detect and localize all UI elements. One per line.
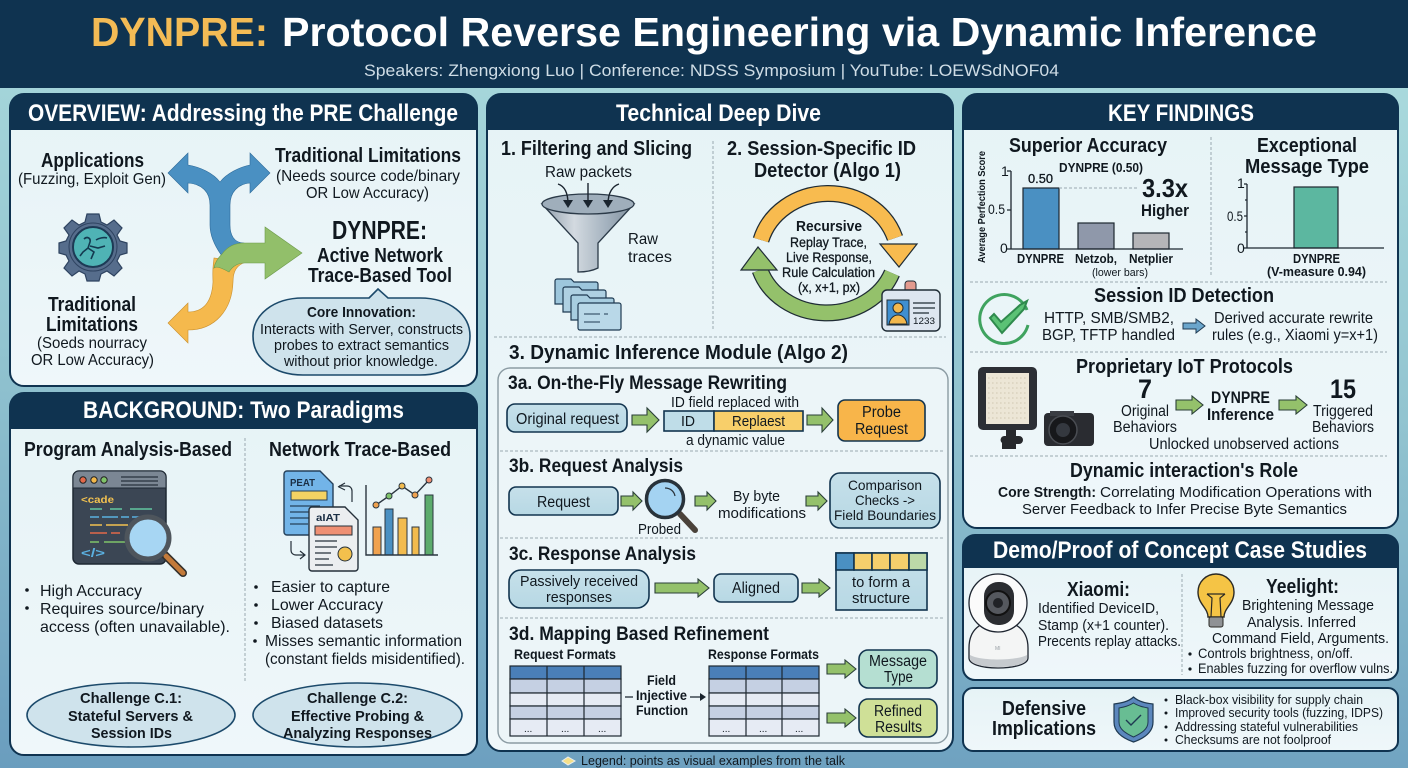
box: message type: Message bbox=[869, 653, 927, 670]
table: request formats: ... bbox=[561, 724, 569, 735]
text: protocols handled: HTTP, SMB/SMB2, bbox=[1044, 310, 1174, 327]
text: traditional limitations bottom bbox=[31, 294, 154, 369]
label: field injective function: Field bbox=[647, 672, 676, 688]
text: applications: Applications bbox=[41, 150, 144, 172]
callout: core innovation: probes to extract semantics bbox=[274, 338, 449, 354]
box: comparison checks: Checks -> bbox=[855, 492, 915, 508]
text: traditional limitations top: (Needs source code/binary bbox=[276, 168, 460, 185]
text: recursive loop: (x, x+1, px) bbox=[798, 279, 860, 295]
icon: camera bbox=[1044, 411, 1094, 446]
text: 7 original behaviors: Original bbox=[1121, 403, 1169, 420]
list: defensive bullets: Addressing stateful vulnerabilities bbox=[1175, 719, 1358, 734]
section: 3a rewriting: 3a. On-the-Fly Message Rewriting bbox=[508, 373, 787, 394]
header banner bbox=[0, 0, 1408, 88]
list: network trace bullets: (constant fields misidentified). bbox=[265, 651, 465, 668]
list: program analysis bullets: access (often unavailable). bbox=[40, 619, 230, 636]
text: traditional limitations bottom: (Soeds nourracy bbox=[37, 335, 147, 352]
list: defensive bullets: Checksums are not foolproof bbox=[1175, 732, 1331, 747]
text: DYNPRE tool: DYNPRE: bbox=[332, 215, 427, 245]
icon: led light panel bbox=[978, 367, 1037, 449]
panel: background bbox=[10, 393, 477, 755]
text: derived rewrite rules: rules (e.g., Xiaomi y=x+1) bbox=[1212, 327, 1378, 344]
list: program analysis bullets: High Accuracy bbox=[40, 583, 142, 600]
label: field injective function: Injective bbox=[636, 687, 687, 703]
callout: 3.3x higher: Higher bbox=[1141, 201, 1189, 220]
callout: core innovation bbox=[253, 289, 470, 375]
panel: defensive implications bbox=[963, 688, 1398, 751]
icon: xiaomi camera bbox=[969, 574, 1028, 668]
text: yeelight: Analysis. Inferred bbox=[1247, 614, 1356, 631]
callout: challenge C.2: Challenge C.2: bbox=[307, 690, 408, 707]
icon: green check bbox=[980, 295, 1028, 344]
heading: session-specific id detector bbox=[727, 138, 916, 182]
section: 3c response analysis: 3c. Response Analysis bbox=[509, 544, 696, 565]
callout: challenge C.1 bbox=[27, 683, 235, 747]
text: dynpre inference: Inference bbox=[1207, 405, 1274, 424]
arrow: blue bbox=[1183, 319, 1205, 333]
list: yeelight bullets bbox=[1188, 645, 1393, 676]
box: comparison checks: Comparison bbox=[848, 477, 922, 493]
heading: program analysis: Program Analysis-Based bbox=[24, 439, 232, 461]
chart: average perfection score bars: DYNPRE (0.50) bbox=[1059, 160, 1143, 175]
box: message type: Type bbox=[884, 669, 913, 686]
chart: v-measure bar: 0 bbox=[1237, 240, 1245, 256]
title: Protocol Reverse Engineering via Dynamic Inference bbox=[282, 9, 1317, 55]
box: passively received: Passively received bbox=[520, 573, 638, 590]
text: core strength: Correlating Modification Operations with bbox=[1100, 484, 1372, 501]
callout: core innovation: Interacts with Server, constructs bbox=[260, 322, 463, 338]
table: response formats: ... bbox=[722, 724, 730, 735]
list: yeelight bullets: Controls brightness, on/off. bbox=[1198, 645, 1353, 661]
text: yeelight bbox=[1212, 576, 1389, 647]
arrow bbox=[621, 492, 642, 510]
arrow bbox=[1176, 396, 1203, 414]
arrow: blue split arrow bbox=[168, 153, 270, 262]
list: defensive bullets bbox=[1164, 692, 1383, 747]
label: by byte modifications bbox=[718, 488, 806, 522]
chart: average perfection score bars: 0 bbox=[1000, 240, 1008, 256]
label: by byte modifications: modifications bbox=[718, 505, 806, 522]
heading: filtering and slicing: 1. Filtering and Slicing bbox=[501, 138, 692, 160]
box: structure: to form a bbox=[852, 574, 911, 591]
text: DYNPRE tool bbox=[308, 215, 452, 287]
text: recursive loop: Replay Trace, bbox=[790, 234, 867, 250]
callout: challenge C.1: Session IDs bbox=[91, 725, 172, 742]
callout: challenge C.2 bbox=[253, 683, 462, 747]
text: traditional limitations bottom: Limitations bbox=[46, 314, 138, 336]
heading: demo: Demo/Proof of Concept Case Studies bbox=[993, 537, 1367, 564]
heading: overview: OVERVIEW: Addressing the PRE Challenge bbox=[28, 100, 458, 127]
label: probed: Probed bbox=[638, 522, 681, 538]
text: derived rewrite rules: Derived accurate rewrite bbox=[1214, 310, 1373, 327]
field: id and replaced value: ID bbox=[681, 414, 695, 430]
table: request formats: ... bbox=[598, 724, 606, 735]
text: yeelight: Brightening Message bbox=[1242, 597, 1374, 614]
list: network trace bullets bbox=[253, 579, 465, 668]
chart: paradigm icon chart bbox=[366, 477, 438, 555]
chart: average perfection score bars: Netplier bbox=[1129, 251, 1173, 266]
icon: documents bbox=[284, 471, 358, 571]
text: xiaomi: Xiaomi: bbox=[1067, 579, 1130, 601]
text: yeelight: Command Field, Arguments. bbox=[1212, 630, 1389, 647]
box: structure bbox=[836, 553, 927, 610]
arrow bbox=[806, 492, 827, 510]
arrow bbox=[695, 492, 716, 510]
label: field injective function: Function bbox=[636, 702, 688, 718]
box: comparison checks: Field Boundaries bbox=[834, 507, 936, 523]
text: core strength: Server Feedback to Infer Precise Byte Semantics bbox=[1022, 501, 1347, 518]
heading: exceptional message type: Message Type bbox=[1245, 156, 1369, 178]
table: request formats: ... bbox=[524, 724, 532, 735]
text: core strength bbox=[998, 484, 1372, 518]
text: 15 triggered behaviors: Triggered bbox=[1313, 403, 1373, 420]
table: response formats: ... bbox=[795, 724, 803, 735]
text: 15 triggered behaviors bbox=[1312, 374, 1374, 436]
text: applications: (Fuzzing, Exploit Gen) bbox=[18, 171, 166, 188]
text: 7 original behaviors bbox=[1113, 374, 1177, 436]
text: xiaomi: Precents replay attacks. bbox=[1038, 633, 1181, 650]
text: 15 triggered behaviors: Behaviors bbox=[1312, 419, 1374, 436]
section: 3b request analysis: 3b. Request Analysis bbox=[509, 456, 683, 477]
arrow bbox=[1279, 396, 1307, 414]
label: raw packets: Raw packets bbox=[545, 164, 632, 181]
box: original request bbox=[507, 404, 627, 432]
label: request formats: Request Formats bbox=[514, 646, 616, 662]
text: traditional limitations top: Traditional Limitations bbox=[275, 145, 461, 167]
text: xiaomi: Identified DeviceID, bbox=[1038, 600, 1159, 617]
chart: v-measure bar: 0.5 bbox=[1227, 208, 1243, 224]
chart: v-measure bar: 1 bbox=[1237, 175, 1245, 191]
text: traditional limitations bottom: Traditional bbox=[48, 294, 136, 316]
list: defensive bullets: Improved security tools (fuzzing, IDPS) bbox=[1175, 705, 1383, 720]
box: refined results: Refined bbox=[874, 703, 922, 720]
text: 7 original behaviors: Behaviors bbox=[1113, 419, 1177, 436]
chart: average perfection score bars bbox=[977, 151, 1183, 279]
arrow bbox=[632, 408, 659, 432]
field: id and replaced value: Replaest bbox=[732, 414, 785, 430]
box: request bbox=[509, 487, 618, 515]
text: protocols handled bbox=[1042, 310, 1175, 344]
callout: core innovation: Core Innovation: bbox=[307, 304, 416, 321]
icon: xiaomi camera: MI bbox=[995, 646, 1001, 652]
icon: code window with magnifier: </> bbox=[81, 546, 105, 560]
text: derived rewrite rules bbox=[1212, 310, 1378, 344]
box: aligned bbox=[714, 574, 798, 602]
box: probe request bbox=[838, 400, 925, 441]
text: DYNPRE tool: Trace-Based Tool bbox=[308, 265, 452, 287]
arrow bbox=[807, 408, 833, 432]
arrow bbox=[802, 579, 830, 597]
text: traditional limitations top bbox=[275, 145, 461, 202]
heading: defensive implications: Implications bbox=[992, 718, 1096, 740]
chart: average perfection score bars: Average Perfection Score bbox=[977, 151, 988, 263]
icon: magnifier bbox=[646, 480, 695, 530]
text: xiaomi: Stamp (x+1 counter). bbox=[1038, 617, 1169, 634]
icon: recursive cycle arrows bbox=[741, 194, 917, 313]
icon: code window with magnifier bbox=[73, 471, 183, 573]
heading: background: BACKGROUND: Two Paradigms bbox=[83, 397, 404, 424]
section: 3c response analysis bbox=[509, 544, 927, 610]
chart: v-measure bar: DYNPRE bbox=[1293, 251, 1340, 266]
heading: defensive implications bbox=[992, 698, 1096, 740]
icon: shield bbox=[1114, 697, 1153, 742]
text: recursive loop: Recursive bbox=[796, 218, 862, 235]
list: network trace bullets: Lower Accuracy bbox=[271, 597, 383, 614]
arrow bbox=[827, 709, 856, 727]
chart: v-measure bar bbox=[1227, 175, 1384, 279]
box: probe request: Request bbox=[855, 421, 909, 438]
arrow: orange down-left arrow bbox=[168, 258, 246, 343]
list: program analysis bullets: Requires source/binary bbox=[40, 601, 204, 618]
heading: dynamic inference module: 3. Dynamic Inference Module (Algo 2) bbox=[509, 342, 848, 364]
heading: technical deep dive: Technical Deep Dive bbox=[616, 100, 821, 127]
box: aligned: Aligned bbox=[732, 580, 780, 597]
panel: overview bbox=[10, 94, 477, 386]
text: traditional limitations top: OR Low Accuracy) bbox=[306, 185, 429, 202]
callout: challenge C.2: Effective Probing & bbox=[291, 708, 424, 725]
icon: light bulb bbox=[1198, 574, 1234, 627]
title: DYNPRE: bbox=[91, 9, 268, 55]
text: unlocked actions: Unlocked unobserved actions bbox=[1149, 436, 1339, 453]
box: refined results bbox=[859, 699, 937, 737]
callout: challenge C.1: Stateful Servers & bbox=[68, 708, 193, 725]
section: 3d mapping refinement: 3d. Mapping Based Refinement bbox=[509, 624, 770, 645]
label: response formats: Response Formats bbox=[708, 646, 819, 662]
label: raw traces: traces bbox=[628, 249, 672, 266]
chart: average perfection score bars: 1 bbox=[1001, 163, 1009, 179]
text: traditional limitations bottom: OR Low Accuracy) bbox=[31, 352, 154, 369]
section: 3b request analysis bbox=[509, 456, 940, 538]
list: defensive bullets: Black-box visibility for supply chain bbox=[1175, 692, 1363, 707]
list: network trace bullets: Biased datasets bbox=[271, 615, 383, 632]
box: passively received: responses bbox=[546, 589, 612, 606]
table: response formats: ... bbox=[759, 724, 767, 735]
list: network trace bullets: Misses semantic information bbox=[265, 633, 462, 650]
section: 3a rewriting bbox=[507, 373, 925, 449]
text: applications bbox=[18, 150, 166, 188]
callout: challenge C.2: Analyzing Responses bbox=[283, 725, 432, 742]
text: dynpre inference: DYNPRE bbox=[1211, 388, 1270, 407]
box: request: Request bbox=[537, 494, 591, 511]
icon: gear with figure bbox=[59, 214, 127, 281]
text: 7 original behaviors: 7 bbox=[1138, 374, 1152, 404]
text: recursive loop bbox=[782, 218, 875, 295]
text: protocols handled: BGP, TFTP handled bbox=[1042, 327, 1175, 344]
heading: superior accuracy: Superior Accuracy bbox=[1009, 135, 1168, 157]
box: probe request: Probe bbox=[862, 404, 901, 421]
heading: exceptional message type bbox=[1245, 135, 1369, 178]
text: dynpre inference bbox=[1207, 388, 1274, 424]
label: raw traces bbox=[628, 231, 672, 266]
table: request formats bbox=[510, 666, 621, 736]
field: id and replaced value bbox=[664, 411, 803, 431]
subtitle: Speakers: Zhengxiong Luo | Conference: NDSS Symposium | YouTube: LOEWSdNOF04 bbox=[364, 61, 1059, 80]
icon: stacked folders bbox=[555, 279, 621, 330]
heading: exceptional message type: Exceptional bbox=[1257, 135, 1357, 157]
heading: dynamic interaction's role: Dynamic interaction's Role bbox=[1070, 460, 1298, 482]
box: comparison checks bbox=[830, 473, 940, 528]
box: original request: Original request bbox=[516, 411, 620, 428]
heading: defensive implications: Defensive bbox=[1002, 698, 1086, 720]
section: 3d mapping refinement bbox=[509, 624, 937, 737]
text: DYNPRE tool: Active Network bbox=[317, 245, 444, 267]
chart: v-measure bar: (V-measure 0.94) bbox=[1267, 264, 1366, 279]
heading: session id detection: Session ID Detection bbox=[1094, 285, 1274, 307]
icon: documents: aIAT bbox=[316, 513, 340, 524]
chart: average perfection score bars: Netzob, bbox=[1075, 251, 1117, 266]
heading: network trace: Network Trace-Based bbox=[269, 439, 451, 461]
text: 15 triggered behaviors: 15 bbox=[1330, 374, 1356, 404]
box: passively received bbox=[509, 570, 649, 608]
text: recursive loop: Rule Calculation bbox=[782, 264, 875, 280]
text: core strength: Core Strength: bbox=[998, 484, 1096, 501]
label: by byte modifications: By byte bbox=[733, 488, 780, 505]
chart: average perfection score bars: (lower bars) bbox=[1092, 267, 1148, 279]
box: refined results: Results bbox=[875, 719, 922, 736]
label: raw traces: Raw bbox=[628, 231, 658, 248]
box: structure: structure bbox=[852, 590, 910, 607]
chart: average perfection score bars: 0.5 bbox=[988, 201, 1005, 217]
icon: code window with magnifier: <cade bbox=[81, 495, 114, 506]
callout: challenge C.1: Challenge C.1: bbox=[80, 690, 182, 707]
box: message type bbox=[859, 650, 937, 688]
icon: documents: PEAT bbox=[290, 478, 315, 489]
chart: average perfection score bars: DYNPRE bbox=[1017, 251, 1064, 266]
text: xiaomi bbox=[1038, 579, 1181, 650]
list: yeelight bullets: Enables fuzzing for overflow vulns. bbox=[1198, 660, 1393, 676]
icon: funnel bbox=[542, 183, 634, 272]
callout: core innovation: without prior knowledge. bbox=[283, 354, 438, 370]
icon: id card bbox=[882, 281, 940, 331]
legend: Legend: points as visual examples from the talk bbox=[581, 753, 845, 768]
panel: key findings bbox=[963, 94, 1398, 528]
chart: average perfection score bars: 0.50 bbox=[1028, 171, 1053, 186]
table: response formats bbox=[709, 666, 819, 736]
arrow: green arrow to DYNPRE bbox=[214, 227, 302, 279]
panel: demo case studies bbox=[963, 535, 1398, 680]
list: network trace bullets: Easier to capture bbox=[271, 579, 390, 596]
heading: key findings: KEY FINDINGS bbox=[1108, 100, 1254, 127]
arrow bbox=[827, 660, 856, 678]
list: program analysis bullets bbox=[25, 583, 230, 636]
icon: id card: 1233 bbox=[913, 316, 935, 326]
panel: technical deep dive bbox=[487, 94, 953, 751]
heading: proprietary iot protocols: Proprietary IoT Protocols bbox=[1076, 356, 1293, 378]
panel: dynamic inference module bbox=[498, 368, 948, 743]
label: field injective function bbox=[625, 672, 706, 718]
arrow bbox=[655, 579, 709, 597]
label: id field replaced: ID field replaced with bbox=[671, 395, 799, 411]
callout: 3.3x higher bbox=[1141, 173, 1189, 220]
label: dynamic value: a dynamic value bbox=[686, 433, 785, 449]
heading: session-specific id detector: 2. Session-Specific ID bbox=[727, 138, 916, 160]
text: yeelight: Yeelight: bbox=[1266, 576, 1339, 598]
heading: session-specific id detector: Detector (Algo 1) bbox=[754, 160, 901, 182]
text: recursive loop: Live Response, bbox=[786, 249, 872, 265]
callout: 3.3x higher: 3.3x bbox=[1142, 173, 1188, 203]
